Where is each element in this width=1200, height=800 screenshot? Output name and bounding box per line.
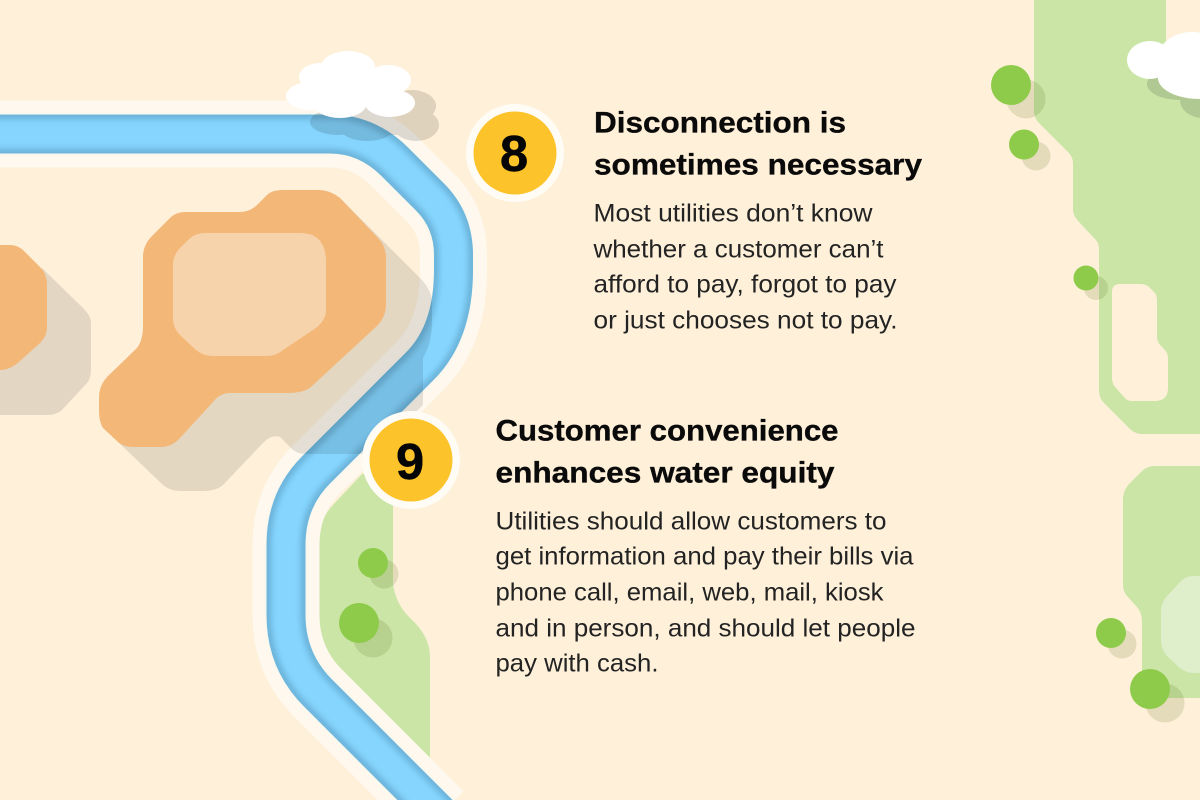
body text 9: phone call, email, web, mail, kiosk [496,578,884,606]
trees lower [339,548,398,658]
body text 9: pay with cash. [496,650,658,678]
panel: right lower green land [1123,466,1200,698]
panel: lower green land [319,474,430,758]
panel: orange land left [0,245,47,370]
heading 8: Disconnection is [594,106,846,140]
body text 9 [496,508,916,678]
heading 9 [496,414,838,490]
heading 8: sometimes necessary [594,148,922,182]
body text 8 [592,200,898,334]
heading 9: enhances water equity [496,456,835,490]
panel: land shadows [0,198,432,491]
body text 8: Most utilities don’t know [594,200,873,228]
badge 9 [362,411,460,509]
trees right [991,65,1184,722]
body text 9: and in person, and should let people [496,614,916,642]
panel: orange land centre [99,190,386,447]
body text 8: afford to pay, forgot to pay [594,270,897,298]
body text 8: whether a customer can’t [592,236,884,264]
cloud right [1127,32,1200,118]
body text 8: or just chooses not to pay. [594,306,898,334]
badge 9: 9 [396,433,424,490]
heading 9: Customer convenience [496,414,838,448]
body text 9: Utilities should allow customers to [496,508,886,536]
panel: right upper green land [1034,0,1200,434]
river [0,134,454,800]
river bank [0,134,454,800]
cloud shadow left [310,90,439,141]
cloud left [286,51,415,118]
badge 8: 8 [500,125,528,182]
heading 8 [594,106,922,182]
body text 9: get information and pay their bills via [496,542,914,570]
badge 8 [466,104,564,202]
